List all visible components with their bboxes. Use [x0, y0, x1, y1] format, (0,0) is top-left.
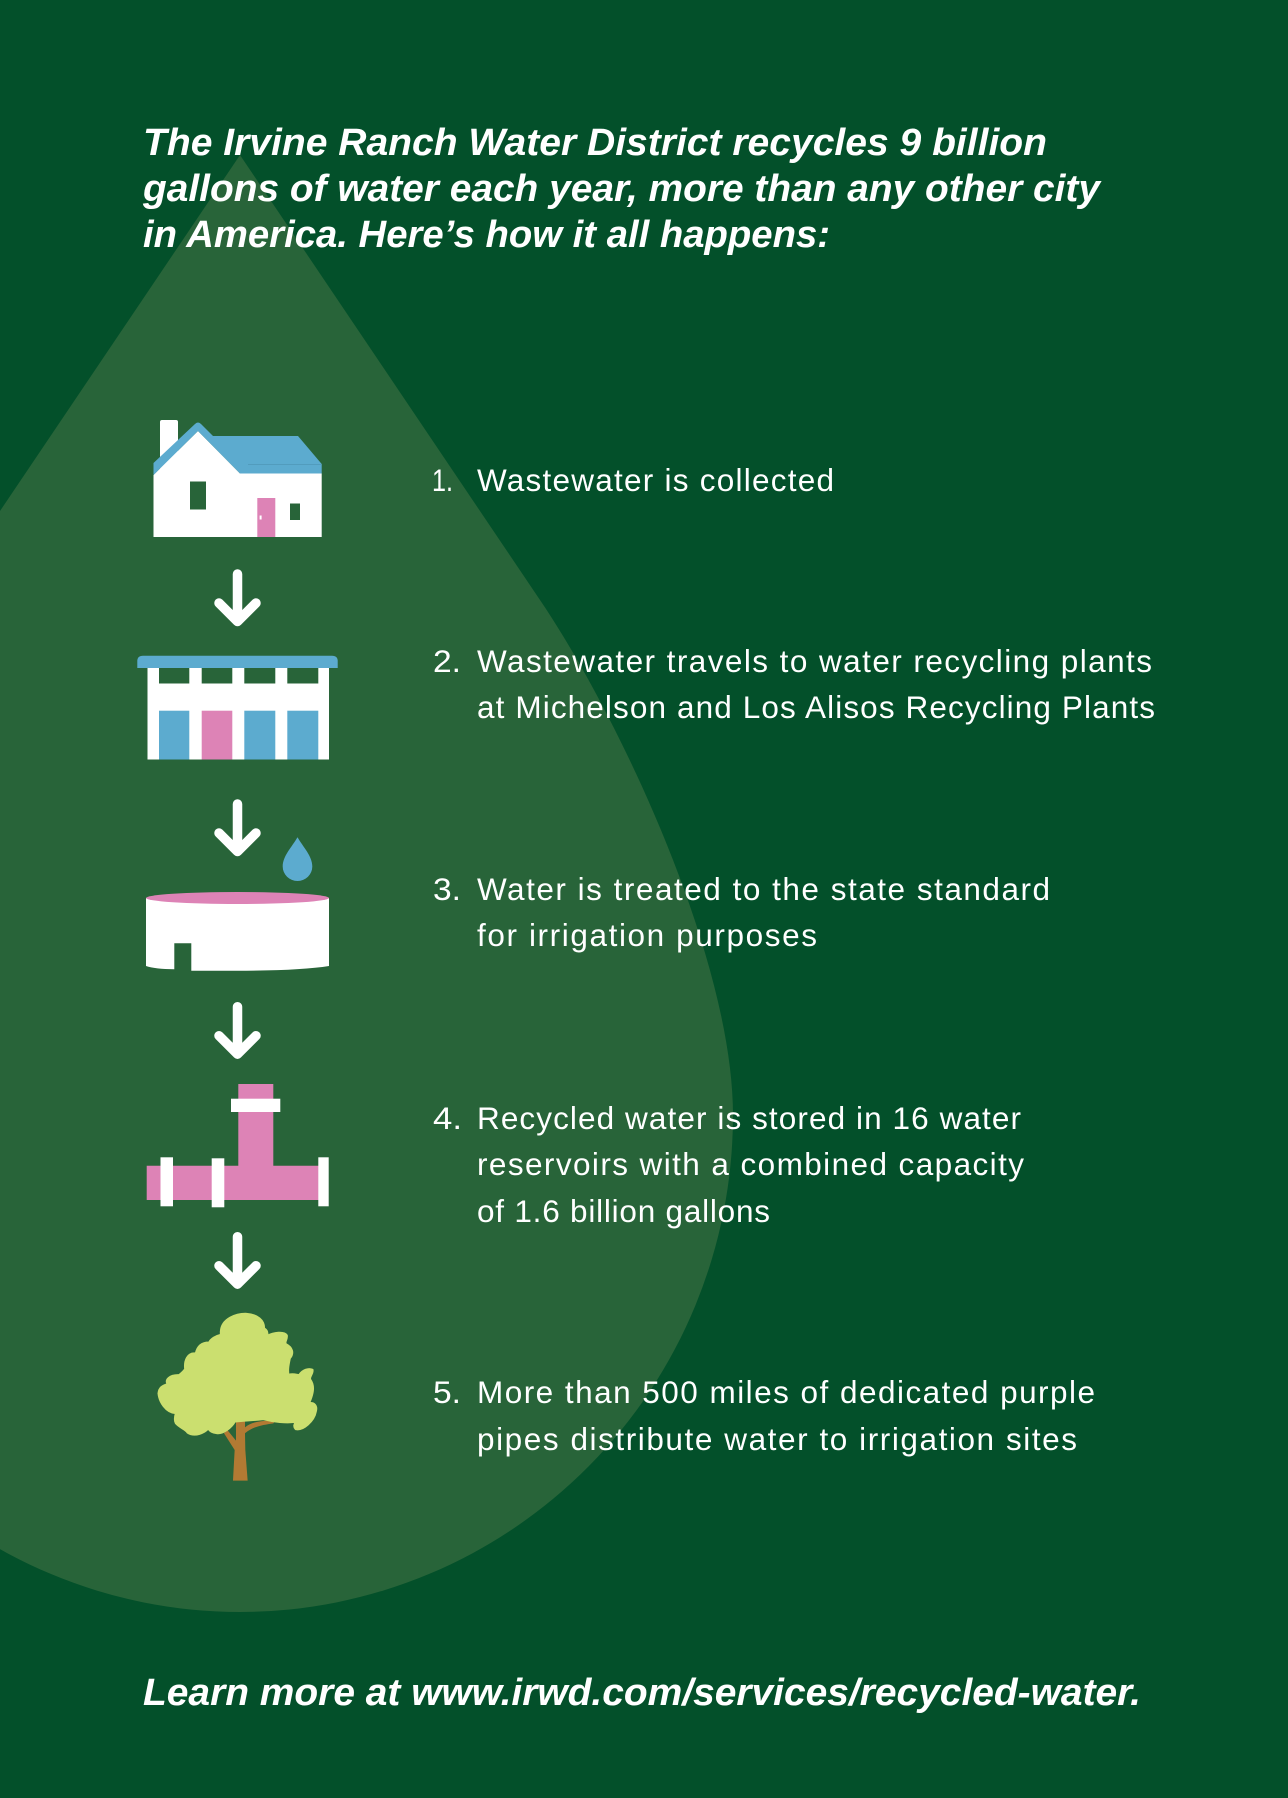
step 2 text: [433, 643, 1155, 725]
step 4 text: 4.: [433, 1100, 462, 1136]
background water drop: [0, 155, 733, 1612]
arrow: house to plant: [219, 574, 256, 622]
icon: tree: [158, 1314, 316, 1481]
step 3 text: [433, 871, 1050, 953]
arrow: plant to tank: [219, 804, 256, 852]
step 4 text: reservoirs with a combined capacity: [477, 1146, 1024, 1182]
title: gallons of water each year, more than any other city: [142, 168, 1102, 210]
step 5 text: [433, 1374, 1095, 1457]
step 5 text: More than 500 miles of dedicated purple: [477, 1374, 1095, 1410]
step 1 text: 1.: [432, 462, 453, 498]
step 5 text: pipes distribute water to irrigation sites: [477, 1421, 1077, 1457]
step 3 text: 3.: [433, 871, 461, 907]
step 3 text: Water is treated to the state standard: [477, 871, 1050, 907]
icon: house: [154, 420, 322, 537]
step 2 text: 2.: [433, 643, 461, 679]
step 4 text: Recycled water is stored in 16 water: [477, 1100, 1021, 1136]
step 2 text: at Michelson and Los Alisos Recycling Plants: [477, 689, 1155, 725]
arrow: pipes to tree: [219, 1237, 256, 1284]
step 5 text: 5.: [433, 1374, 461, 1410]
step 2 text: Wastewater travels to water recycling plants: [477, 643, 1152, 679]
step 4 text: of 1.6 billion gallons: [477, 1193, 770, 1229]
icon: water droplet: [283, 837, 312, 881]
title: The Irvine Ranch Water District recycles 9 billion: [143, 122, 1047, 164]
icon: storage pipe: [147, 1084, 329, 1207]
arrow: tank to pipes: [219, 1007, 256, 1054]
footer call to action: Learn more at www.irwd.com/services/recycled-water.: [143, 1672, 1141, 1714]
step 4 text: [433, 1100, 1024, 1229]
title: [142, 122, 1102, 256]
icon: recycling plant: [137, 656, 338, 760]
icon: treatment tank: [146, 892, 329, 971]
step 3 text: for irrigation purposes: [477, 917, 817, 953]
title: in America. Here’s how it all happens:: [143, 214, 830, 256]
step 1 text: Wastewater is collected: [477, 462, 834, 498]
